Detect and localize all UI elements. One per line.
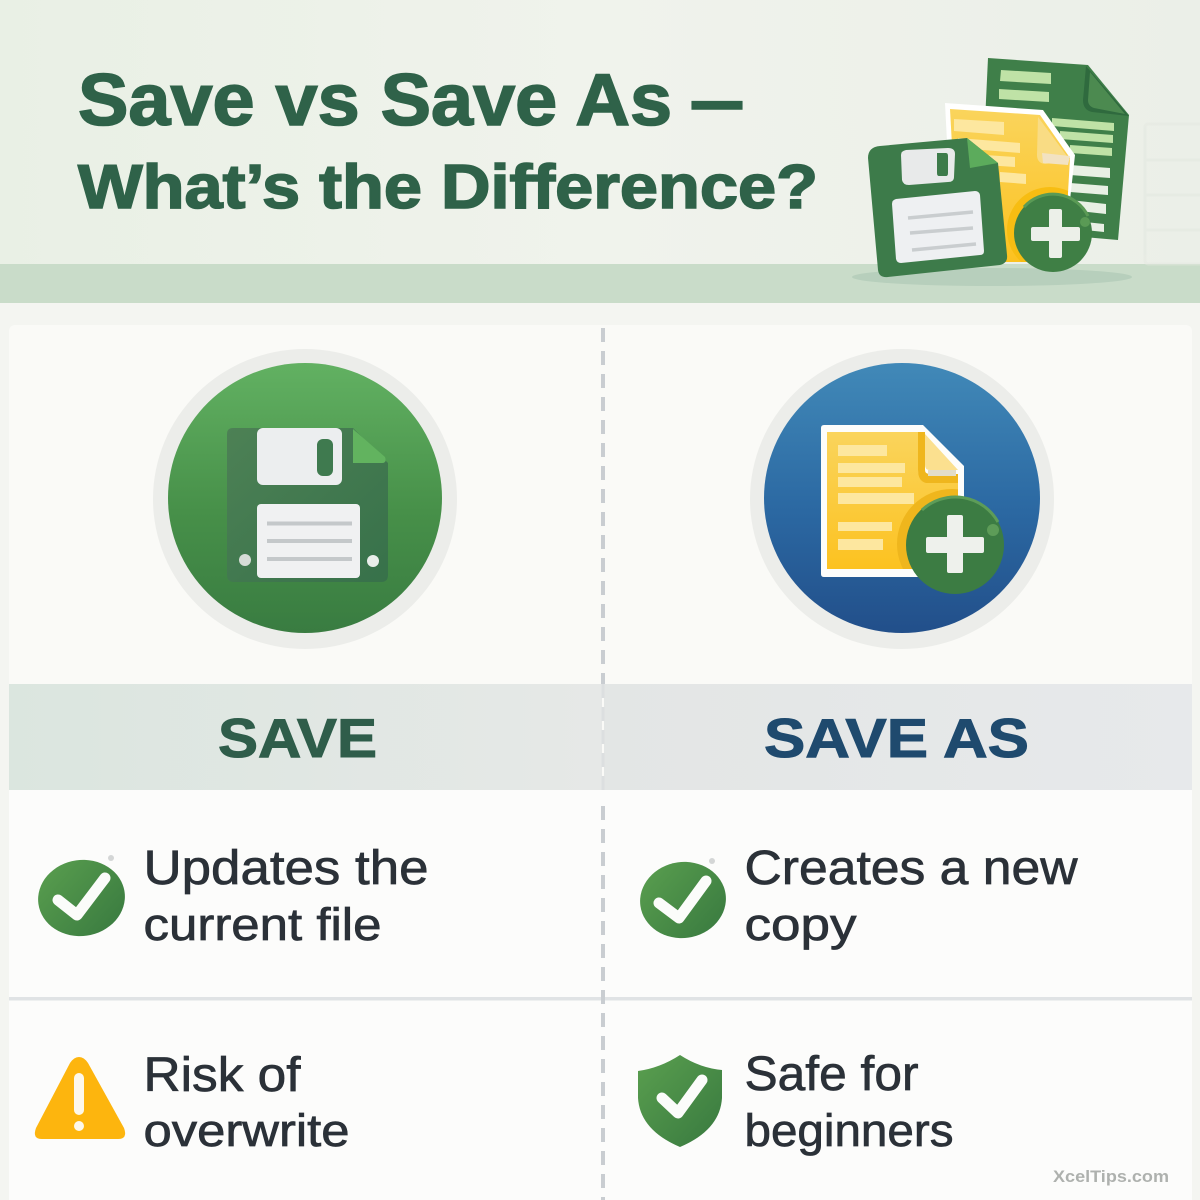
text: save as safety: beginners xyxy=(744,1105,954,1156)
panel: SAVE AS heading band xyxy=(604,684,1192,790)
icon: header file group xyxy=(852,58,1132,286)
text: save as safety: Safe for xyxy=(744,1048,919,1101)
text: save benefit xyxy=(144,842,428,950)
icon: plus badge xyxy=(1014,194,1092,272)
panel: SAVE AS heading band: SAVE AS xyxy=(764,707,1029,769)
title: What’s the Difference? xyxy=(78,153,818,222)
panel: SAVE heading band xyxy=(9,684,602,790)
icon: green check xyxy=(33,854,130,942)
watermark: XcelTips.com xyxy=(1053,1167,1169,1186)
icon: shield check xyxy=(638,1055,722,1147)
icon: green check xyxy=(635,856,731,944)
text: save benefit: Updates the xyxy=(144,842,428,895)
row: creates a new copy xyxy=(635,842,1078,950)
header background xyxy=(0,0,1200,303)
icon: warning triangle xyxy=(35,1057,125,1139)
title xyxy=(78,60,818,222)
text: save as benefit: copy xyxy=(744,899,857,950)
text: save benefit: current file xyxy=(144,899,382,950)
text: save as safety xyxy=(744,1048,954,1156)
icon: new document in blue circle xyxy=(750,349,1054,649)
icon: green spreadsheet document xyxy=(980,58,1129,240)
text: save as benefit xyxy=(744,842,1078,950)
text: save as benefit: Creates a new xyxy=(744,842,1078,895)
title: Save vs Save As xyxy=(78,60,672,141)
comparison card xyxy=(9,325,1192,1200)
title: — xyxy=(692,60,742,141)
row: safe for beginners xyxy=(638,1048,954,1156)
text: save risk: Risk of xyxy=(144,1049,301,1102)
icon: floppy disk xyxy=(868,138,1007,277)
icon: save disk in green circle xyxy=(153,349,457,649)
text: save risk: overwrite xyxy=(144,1105,350,1156)
row: updates the current file xyxy=(33,842,428,950)
text: save risk xyxy=(144,1049,350,1156)
icon: yellow document xyxy=(945,103,1075,262)
panel: SAVE heading band: SAVE xyxy=(218,707,377,769)
row: risk of overwrite xyxy=(35,1049,349,1156)
